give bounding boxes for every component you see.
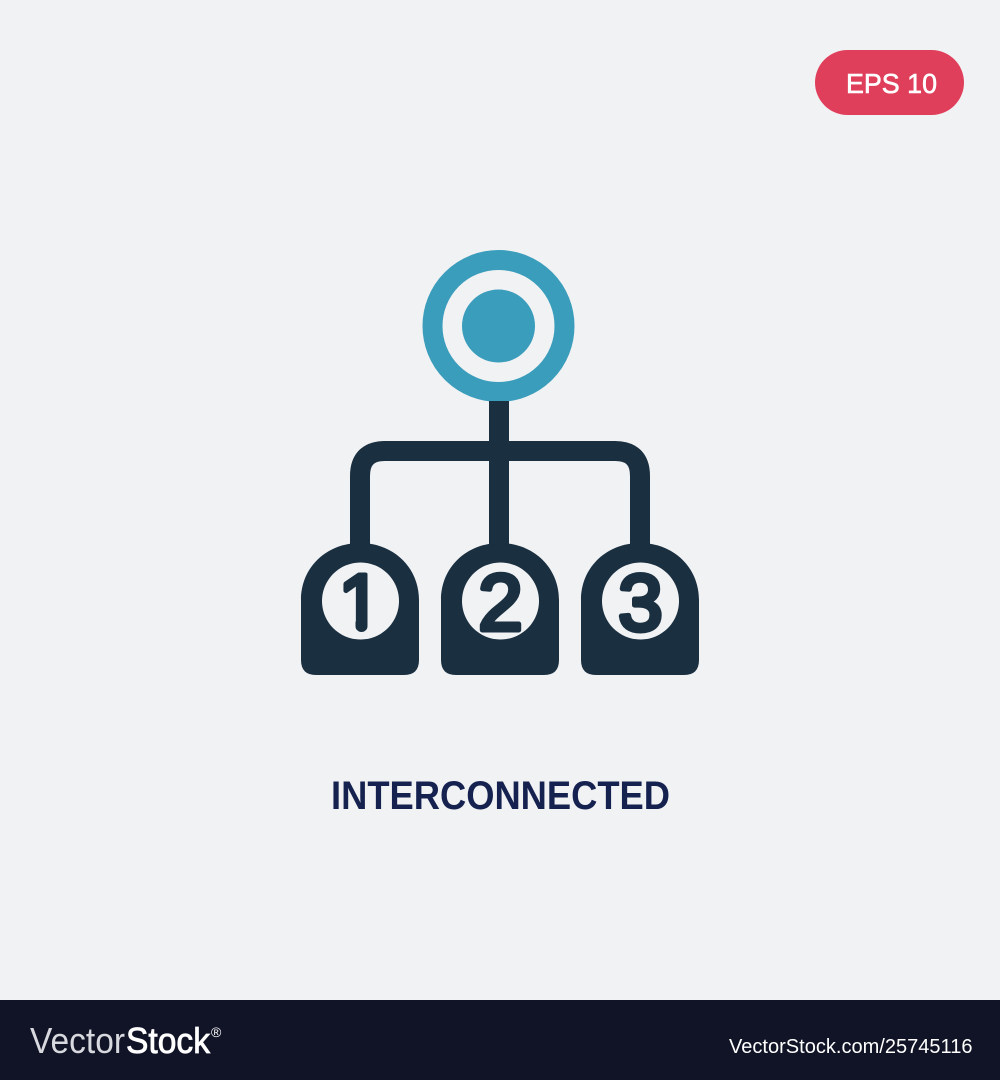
footer logo	[30, 1020, 211, 1061]
footer logo: Stock	[126, 1020, 211, 1061]
title: INTERCONNECTED	[331, 774, 670, 818]
node 3	[581, 543, 699, 675]
badge: EPS 10	[815, 50, 964, 115]
registered mark: ®	[211, 1024, 222, 1040]
badge: EPS 10: EPS 10	[846, 68, 937, 99]
footer bar	[0, 1000, 1000, 1080]
icon: interconnected hierarchy	[301, 260, 699, 675]
node 2	[441, 543, 559, 675]
node 1: 1	[338, 558, 383, 647]
node 2: 2	[478, 558, 523, 647]
footer logo: Vector	[30, 1020, 125, 1061]
icon: top target circle	[432, 260, 564, 392]
image id: VectorStock.com/25745116	[729, 1036, 972, 1058]
node 1	[301, 543, 419, 675]
connector lines	[360, 401, 640, 548]
node 3: 3	[618, 558, 663, 647]
